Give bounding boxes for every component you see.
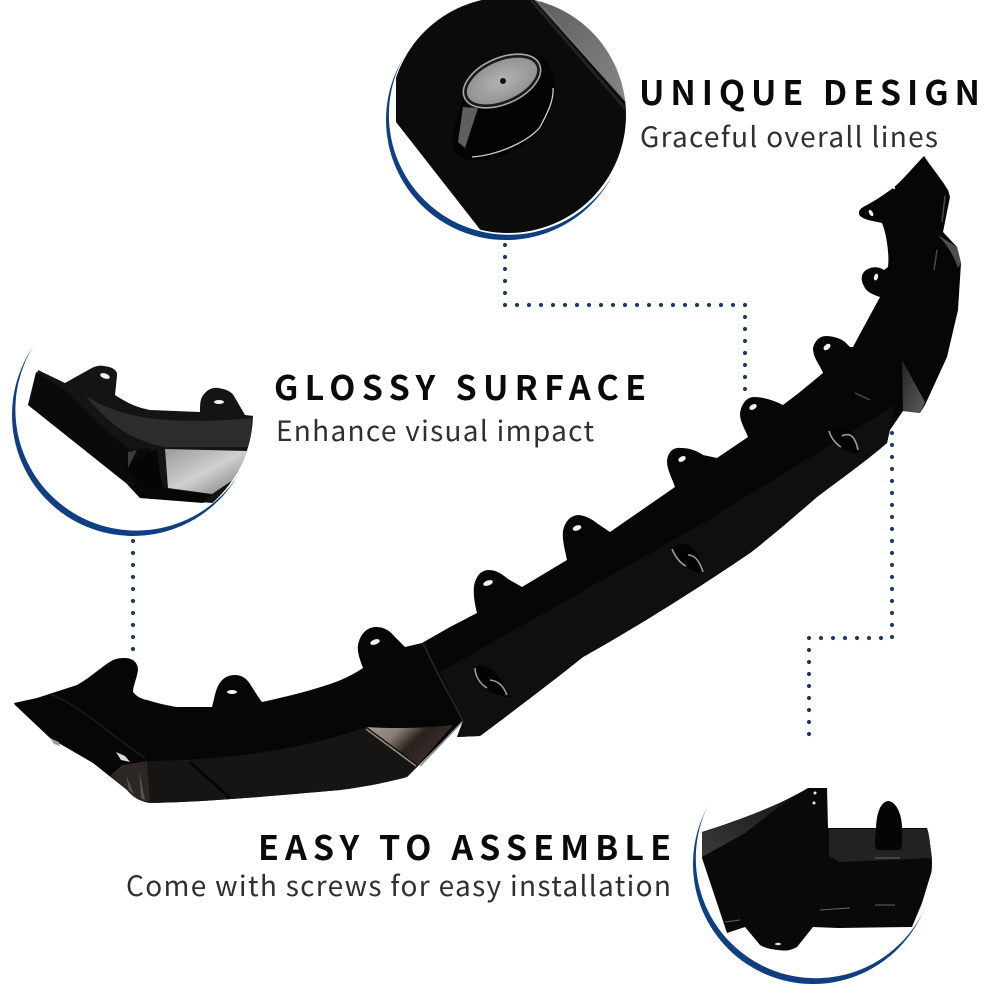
blue arc <box>693 738 936 984</box>
lower left glossy panel <box>147 727 418 803</box>
inset photo <box>702 788 933 951</box>
connector: unique design dotted line <box>505 245 745 394</box>
heading: easy to assemble: EASY TO ASSEMBLE <box>258 821 671 870</box>
connector: easy to assemble dotted line <box>809 433 892 735</box>
panel: unique design inset <box>386 0 640 240</box>
tab holes <box>100 373 110 379</box>
inset photo <box>28 366 254 503</box>
text: unique design subtitle: Graceful overall lines <box>640 116 938 156</box>
blue arc <box>12 289 257 536</box>
panel: easy to assemble inset <box>693 788 932 984</box>
right section lower panel <box>440 405 895 737</box>
bolt <box>875 801 902 850</box>
glossy reflection near centre joint <box>367 725 453 765</box>
fastener <box>452 55 556 161</box>
upper right facets <box>902 360 925 413</box>
glossy reflection on left wing <box>110 761 150 802</box>
text: glossy surface subtitle: Enhance visual impact <box>276 410 594 450</box>
inset photo <box>396 0 640 240</box>
text: easy to assemble subtitle: Come with screws for easy installation <box>126 865 671 905</box>
mounting holes <box>227 187 895 694</box>
main product: front lip <box>14 156 961 803</box>
heading: glossy surface: GLOSSY SURFACE <box>274 361 646 410</box>
fasteners <box>474 428 858 697</box>
blue arc <box>386 0 629 240</box>
panel: glossy surface inset <box>12 344 253 536</box>
connector: glossy surface dotted line <box>131 541 135 651</box>
heading: unique design: UNIQUE DESIGN <box>639 66 980 115</box>
